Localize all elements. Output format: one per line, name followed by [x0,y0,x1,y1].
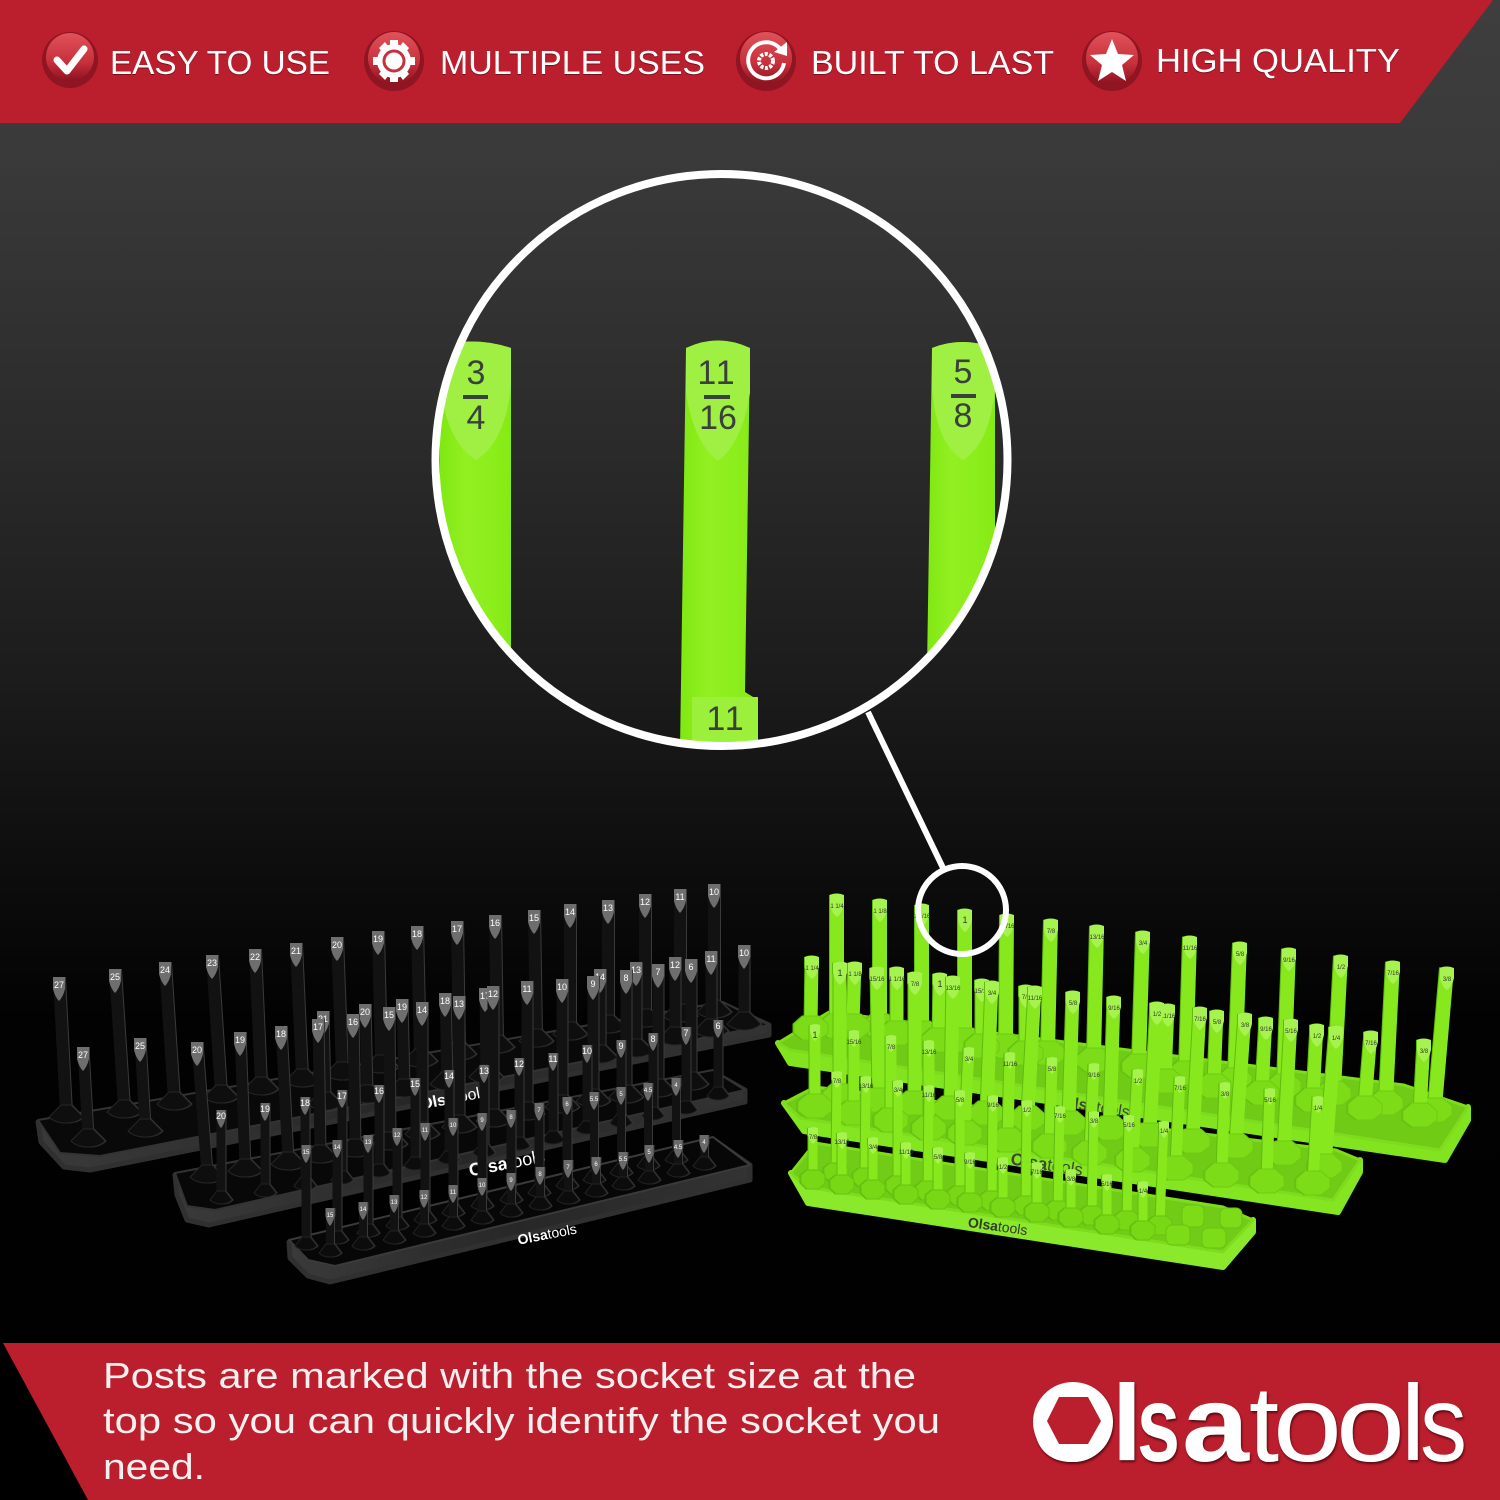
rack A long posts: 15/16 [999,924,1015,930]
rack 3 long posts: 7 [537,1108,541,1114]
rack A long posts: 1/2 [1337,965,1346,971]
rack A long posts: 7/16 [1387,971,1399,977]
rack 1 short posts: 14 [595,972,605,982]
rack A long posts: 9/16 [1283,958,1295,964]
rack 3 short posts: 7 [566,1165,570,1171]
rack 1 short posts: 21 [318,1014,328,1024]
rack C small sockets [1166,1205,1242,1248]
rack 3 short posts: 15 [327,1213,334,1219]
rack C long posts: 3/8 [1090,1119,1099,1125]
label: easy to use: EASY TO USE [110,44,330,81]
Olsatools logo: l [1112,1362,1142,1483]
rack B long posts: 1/4 [1332,1036,1341,1042]
rack 2 short posts: 19 [260,1104,270,1114]
magnifier connector line [868,712,944,870]
rack B short posts: 15/16 [846,1040,862,1046]
rack C short posts: 13/16 [834,1140,850,1146]
icon: check mark badge [42,32,98,88]
rack C long posts: 9/16 [987,1103,999,1109]
footer caption: top so you can quickly identify the socket you [103,1400,940,1441]
rack 1 short posts: 10 [739,948,749,958]
rack C logo: Olsatools [967,1214,1028,1238]
rack B short posts: 3/4 [965,1057,974,1063]
rack 2 short posts: 20 [216,1111,226,1121]
zoomed post: 11/16 with size mark [680,340,758,750]
Olsatools logo: s [1137,1363,1180,1484]
rack 3 long posts: 4 [674,1083,678,1089]
rack 2 long posts: 9 [590,979,596,989]
rack 2 short posts: 6 [715,1021,721,1031]
rack C long posts: 11/16 [922,1093,937,1099]
rack 2 long posts: 7 [655,967,661,977]
zoomed close-up of post markings [436,174,1008,750]
rack A long posts: 5/8 [1236,952,1245,958]
rack B short posts: 13/16 [921,1050,937,1056]
rack C short posts: 1/4 [1139,1189,1148,1195]
icon: star badge [1082,31,1142,91]
rack A short posts: 7/8 [1022,995,1031,1001]
rack C short posts: 3/4 [869,1145,878,1151]
rack 2 long posts: 11 [522,984,532,994]
green rack C (front) [791,1072,1253,1267]
black rack 1 (back) [38,885,769,1170]
rack A long posts: 7/8 [1047,929,1056,935]
rack C short posts: 5/8 [934,1155,943,1161]
rack 1 short posts: 25 [135,1041,145,1051]
rack 2 short posts: 17 [337,1091,347,1101]
label: high quality: HIGH QUALITY [1156,42,1400,79]
rack 3 short posts: 14 [360,1207,367,1213]
rack C long posts: 13/16 [858,1084,874,1090]
rack B long posts: 11/16 [1028,996,1043,1002]
rack 3 long posts: 5.5 [590,1097,599,1103]
rack C short posts: 1/2 [999,1165,1008,1171]
rack 2 short posts: 18 [300,1098,310,1108]
rack A long posts: 3/8 [1443,977,1452,983]
rack C long posts [833,1072,1169,1223]
rack 1 short posts: 12 [670,960,680,970]
rack 1 long posts: 25 [110,972,120,982]
rack B short posts: 1/2 [1134,1079,1143,1085]
Olsatools logo: O [1030,1363,1114,1484]
rack 1 long posts: 15 [529,913,539,923]
rack 1 short posts [78,946,749,1137]
rack C short posts: 9/16 [964,1160,976,1166]
Olsatools logo: l [1401,1362,1425,1483]
rack 1 long posts: 16 [490,918,500,928]
icon: gear badge [364,31,424,91]
label: multiple uses: MULTIPLE USES [440,44,705,81]
rack 2 short posts: 7 [683,1028,689,1038]
rack 1 long posts: 12 [640,897,650,907]
footer caption: Posts are marked with the socket size at the [103,1355,916,1396]
rack B short posts: 3/8 [1221,1092,1230,1098]
zoomed post: 3/4: 4 [467,399,485,437]
rack 1 short posts: 20 [360,1007,370,1017]
rack 1 short posts: 13 [631,965,641,975]
rack 3 short posts: 9 [509,1178,513,1184]
rack C long posts: 5/8 [956,1098,965,1104]
rack C long posts: 1/2 [1023,1108,1032,1114]
rack A short posts: 5/8 [1213,1020,1222,1026]
rack 2 long posts: 17 [313,1022,323,1032]
Olsatools logo: t [1249,1363,1279,1484]
rack 1 short posts: 11 [706,954,716,964]
rack B short posts: 5/16 [1264,1098,1276,1104]
rack A short posts: 1/2 [1313,1034,1322,1040]
rack B short posts: 1 [812,1030,818,1040]
icon: circular arrow gear badge [736,31,796,91]
rack B long posts: 13/16 [945,986,961,992]
rack 3 long posts: 9 [480,1118,484,1124]
rack 3 short posts: 10 [479,1183,486,1189]
rack 3 logo: Olsatools [516,1221,578,1248]
rack A long posts [830,895,1452,1107]
rack 2 long posts: 15 [384,1010,394,1020]
Olsatools logo: s [1420,1363,1467,1484]
zoomed post: 5/8 [927,342,995,668]
zoomed post: 11/16 with size mark: 16 [699,399,737,437]
rack A long posts: 1 [962,915,968,925]
zoomed post: 5/8: 5 [954,353,972,391]
rack 3 long posts [303,1078,678,1243]
rack 2 short posts: 9 [618,1041,624,1051]
rack A short posts: 9/16 [1260,1027,1272,1033]
rack 1 long posts: 11 [675,892,685,902]
rack 2 long posts: 18 [276,1029,286,1039]
rack 1 long posts: 14 [565,907,575,917]
header banner [0,0,1493,123]
zoomed post: 11/16 with size mark: 11 [697,354,737,392]
rack A logo: Olsatools [1061,1094,1131,1121]
rack 2 long posts [192,960,694,1173]
small magnifier ring [918,866,1006,954]
rack 3 short posts: 5 [647,1150,651,1156]
footer caption: need. [103,1446,205,1487]
Olsatools logo [1030,1362,1467,1484]
rack 1 long posts: 19 [373,934,383,944]
rack 1 long posts: 18 [412,929,422,939]
rack 2 long posts: 19 [235,1035,245,1045]
rack 1 long posts: 21 [291,946,301,956]
rack 2 short posts: 10 [582,1046,592,1056]
rack B short posts: 7/16 [1174,1086,1186,1092]
rack B long posts: 1 [837,968,843,978]
Olsatools logo: o [1273,1363,1342,1484]
rack B short posts: 11/16 [1003,1062,1018,1068]
rack B short posts: 7/8 [887,1045,896,1051]
rack 2 long posts: 20 [192,1045,202,1055]
rack 1 short posts: 27 [78,1050,88,1060]
rack 1 long posts: 13 [603,903,613,913]
Olsatools logo: o [1336,1363,1405,1484]
rack C long posts: 7/8 [833,1079,842,1085]
rack C short posts: 11/16 [899,1150,914,1156]
rack A long posts: 11/16 [1183,946,1198,952]
rack B short posts: 9/16 [1088,1073,1100,1079]
rack A short posts: 1 1/4 [805,966,819,972]
rack 3 long posts: 4.5 [644,1088,653,1094]
rack 2 logo: Olsatools [467,1146,547,1180]
rack 1 long posts: 23 [207,958,217,968]
rack 2 long posts: 16 [348,1017,358,1027]
green rack B (middle) [784,963,1360,1212]
Olsatools logo: a [1182,1363,1250,1484]
rack 2 short posts: 15 [410,1079,420,1089]
rack A short posts: 11/16 [1161,1014,1176,1020]
rack A long posts: 13/16 [1089,935,1105,941]
rack 3 short posts: 5.5 [619,1157,628,1163]
rack C short posts: 5/16 [1101,1182,1113,1188]
rack 3 long posts: 15 [303,1150,310,1156]
rack 1 long posts: 17 [452,924,462,934]
rack 3 short posts: 8 [538,1172,542,1178]
rack B long posts: 5/8 [1069,1001,1078,1007]
rack C long posts: 5/16 [1123,1123,1135,1129]
rack 2 long posts: 14 [417,1005,427,1015]
rack 3 long posts: 6 [565,1102,569,1108]
rack 1 long posts: 20 [332,940,342,950]
black rack 2 (middle) [175,960,745,1225]
rack 2 long posts: 13 [454,999,464,1009]
label: built to last: BUILT TO LAST [811,44,1054,81]
rack 1 long posts: 10 [709,887,719,897]
rack B long posts: 1/2 [1153,1012,1162,1018]
rack B short posts: 1/4 [1314,1106,1323,1112]
rack 3 long posts: 10 [450,1123,457,1129]
rack 3 short posts: 6 [594,1162,598,1168]
rack 3 short posts: 4 [702,1140,706,1146]
rack 3 long posts: 13 [365,1140,372,1146]
rack B long posts: 5/16 [1285,1029,1297,1035]
rack C long posts: 3/4 [894,1088,903,1094]
rack 3 long posts: 5 [619,1092,623,1098]
zoomed post: 5/8: 8 [954,397,972,435]
footer caption [103,1355,940,1487]
rack C short posts: 7/8 [809,1135,818,1141]
rack 3 long posts: 11 [422,1128,429,1134]
rack A short posts: 1 1/8 [848,972,862,978]
rack 1 long posts: 24 [160,965,170,975]
rack 3 short posts [327,1135,706,1250]
rack 2 long posts: 8 [623,973,629,983]
rack A long posts: 1 1/16 [914,914,931,920]
rack B logo: Olsatools [1009,1149,1084,1180]
rack B long posts [837,963,1341,1163]
rack A short posts: 7/16 [1365,1041,1377,1047]
rack C long posts: 1/4 [1160,1129,1169,1135]
rack B short posts [812,1025,1323,1180]
rack A short posts [805,957,1429,1112]
rack A short posts: 1 [937,979,943,989]
rack 2 short posts: 16 [374,1086,384,1096]
rack 2 long posts: 10 [557,982,567,992]
rack 1 short posts: 19 [397,1002,407,1012]
rack 2 short posts: 8 [650,1034,656,1044]
rack 3 long posts: 14 [334,1145,341,1151]
rack B short posts: 5/8 [1048,1067,1057,1073]
zoomed post: 3/4 [440,341,511,668]
rack A long posts: 3/4 [1139,941,1148,947]
rack C long posts: 7/16 [1054,1114,1066,1120]
rack 2 long posts: 6 [688,962,694,972]
rack A short posts: 1 1/16 [889,977,906,983]
rack 2 short posts: 12 [514,1059,524,1069]
rack B long posts: 9/16 [1108,1006,1120,1012]
rack B long posts: 3/4 [988,991,997,997]
rack B long posts: 7/16 [1194,1017,1206,1023]
rack C short posts: 7/16 [1031,1170,1043,1176]
rack 2 short posts: 11 [548,1054,558,1064]
rack 2 short posts: 13 [479,1066,489,1076]
rack A short posts: 3/8 [1420,1049,1429,1055]
rack C short posts: 3/8 [1067,1177,1076,1183]
footer banner [3,1343,1500,1500]
rack B long posts: 3/8 [1241,1023,1250,1029]
rack 3 short posts: 12 [421,1195,428,1201]
rack 3 short posts: 4.5 [674,1145,683,1151]
rack 1 long posts: 27 [54,980,64,990]
rack 1 short posts: 18 [440,996,450,1006]
rack 3 long posts: 8 [509,1115,513,1121]
green rack A (back) [778,895,1468,1160]
rack 2 long posts: 12 [488,989,498,999]
rack 3 long posts: 12 [394,1133,401,1139]
zoomed post: 3/4: 3 [467,354,485,392]
black rack 3 (front) [289,1078,750,1282]
rack 1 logo: Olsatools [419,1084,489,1113]
rack 2 short posts: 14 [444,1071,454,1081]
rack 2 short posts [216,1020,721,1197]
rack A long posts: 1 1/8 [873,909,887,915]
rack 1 long posts [54,885,719,1113]
rack A long posts: 1 1/4 [830,904,844,910]
rack 3 short posts: 13 [391,1200,398,1206]
rack 1 short posts: 17 [480,991,490,1001]
rack A short posts: 15/16 [974,989,990,995]
zoomed post: 11/16 with size mark: 11 [706,700,746,738]
rack 1 long posts: 22 [250,952,260,962]
rack B long posts: 7/8 [911,982,920,988]
rack B long posts: 15/16 [869,977,885,983]
rack 3 short posts: 11 [450,1190,457,1196]
rack C short posts [809,1128,1148,1228]
